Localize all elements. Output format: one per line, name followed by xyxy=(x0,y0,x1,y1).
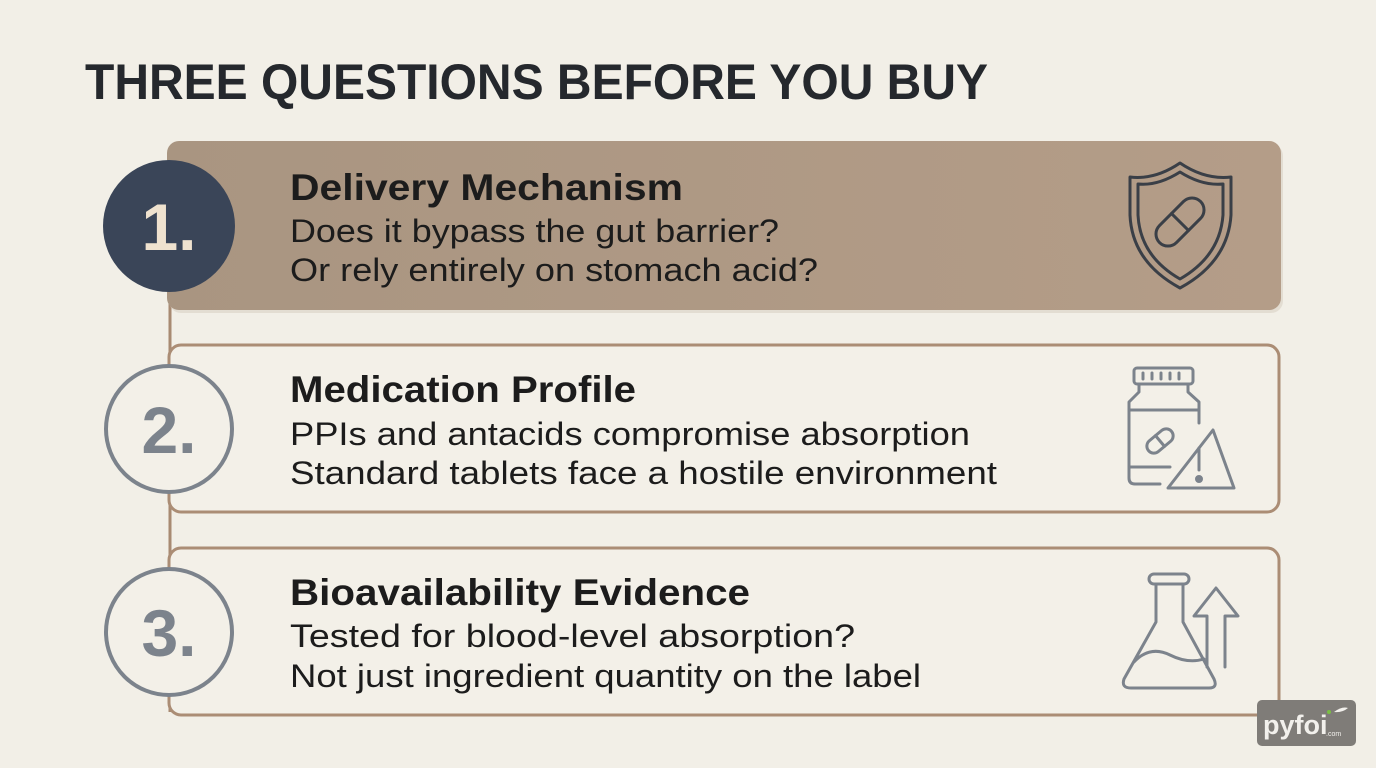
connector line xyxy=(168,300,172,712)
text block: bioavailability xyxy=(290,618,921,694)
text block: delivery: Does it bypass the gut barrier? xyxy=(290,213,779,249)
panel: delivery mechanism xyxy=(167,141,1283,313)
text block: delivery: Or rely entirely on stomach acid? xyxy=(290,252,818,288)
number badge 2: 2. xyxy=(141,393,197,467)
text block: delivery xyxy=(290,213,818,288)
logo: pyfoi: .com xyxy=(1326,731,1341,738)
text block: medication: PPIs and antacids compromise absorption xyxy=(290,416,970,452)
panel: bioavailability evidence xyxy=(169,548,1279,715)
text block: medication xyxy=(290,416,997,491)
number badge 2 xyxy=(106,366,232,492)
text block: bioavailability: Not just ingredient quantity on the label xyxy=(290,658,921,694)
icon: flask with arrow xyxy=(1123,574,1238,688)
number badge 3 xyxy=(106,569,232,695)
number badge 1 xyxy=(103,160,235,292)
logo: pyfoi: pyfoi xyxy=(1263,710,1328,740)
heading: delivery mechanism: Delivery Mechanism xyxy=(290,167,683,208)
title: THREE QUESTIONS BEFORE YOU BUY xyxy=(85,54,988,110)
text block: bioavailability: Tested for blood-level absorption? xyxy=(290,618,855,654)
heading: bioavailability: Bioavailability Evidence xyxy=(290,572,750,613)
heading: medication profile: Medication Profile xyxy=(290,369,636,410)
number badge 3: 3. xyxy=(141,596,197,670)
panel: medication profile xyxy=(169,345,1279,512)
logo: pyfoi xyxy=(1257,700,1356,746)
icon: shield with pill xyxy=(1130,163,1231,288)
text block: medication: Standard tablets face a hostile environment xyxy=(290,455,997,491)
icon: bottle with warning xyxy=(1129,368,1234,488)
number badge 1: 1. xyxy=(141,190,197,264)
